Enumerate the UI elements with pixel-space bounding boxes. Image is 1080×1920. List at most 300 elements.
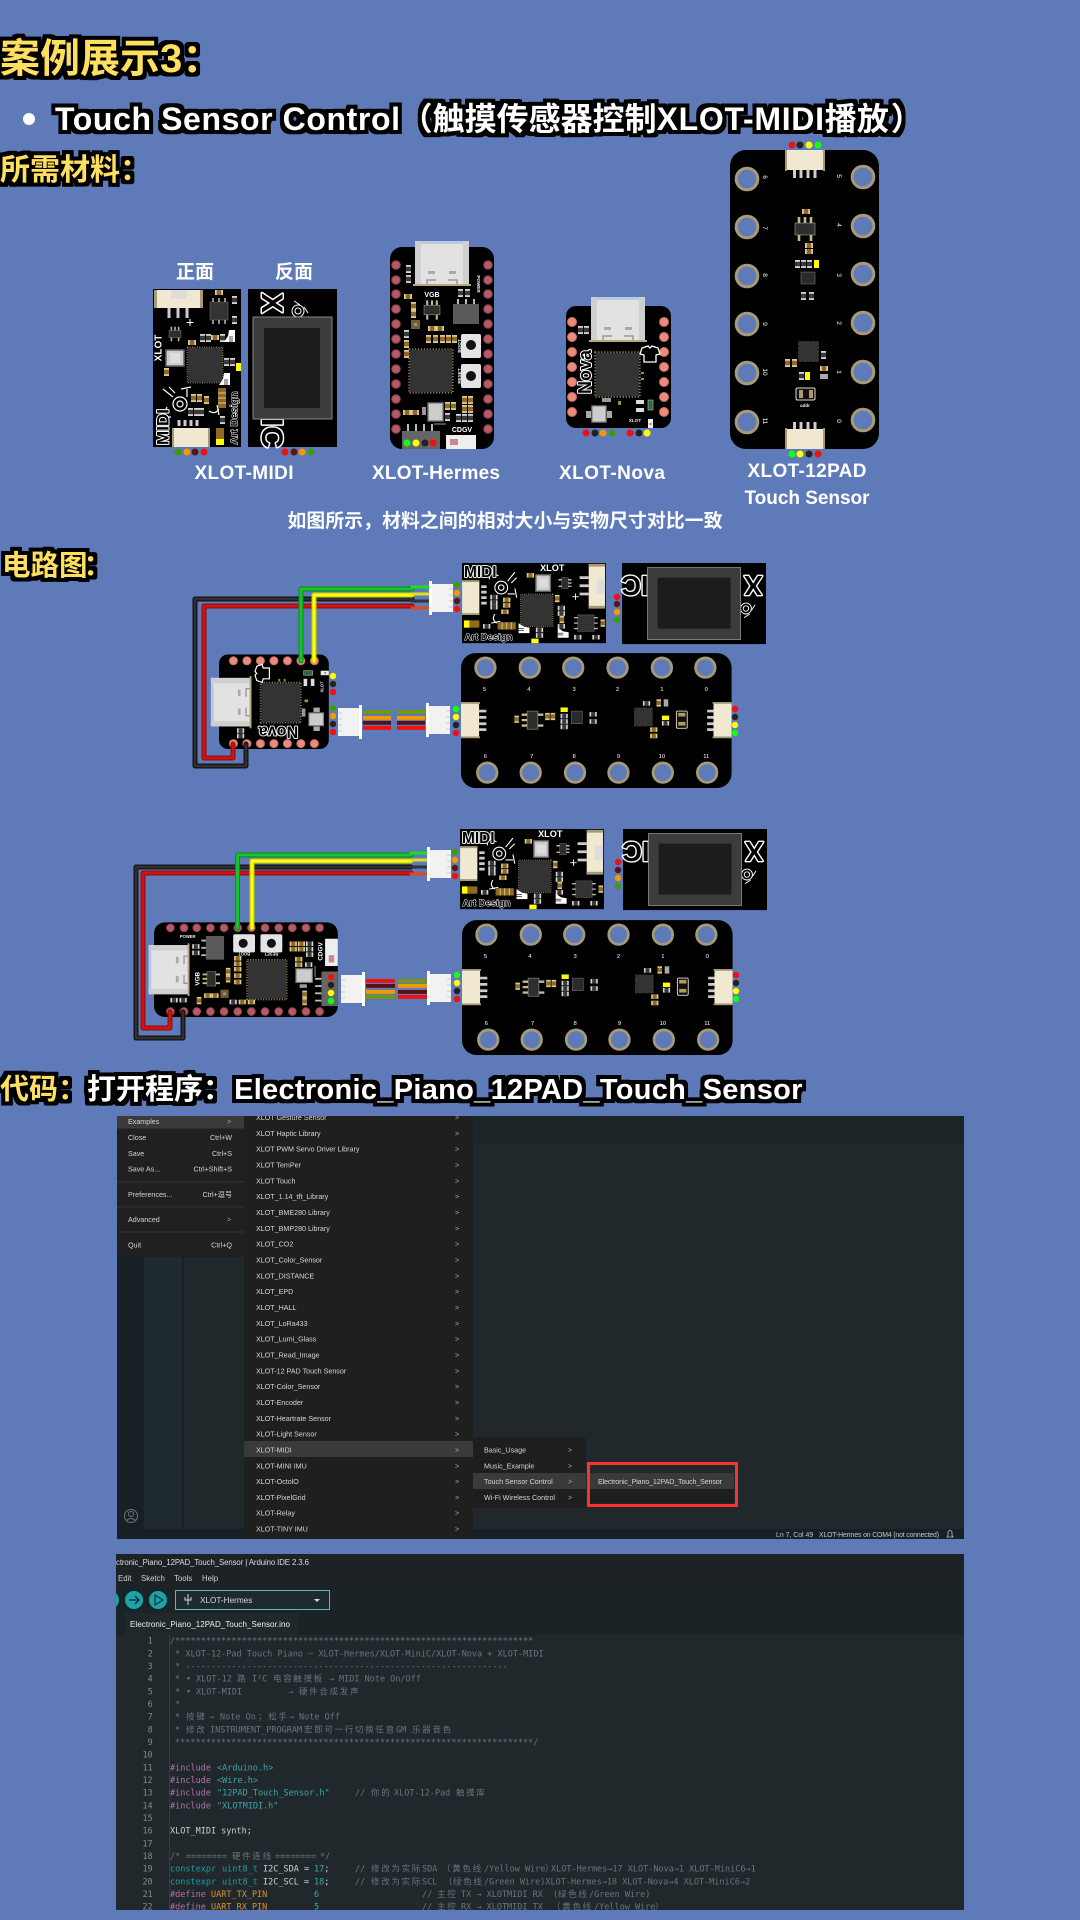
code: line numbers: 14	[142, 1801, 153, 1811]
pin dots: MIDI back	[614, 594, 620, 623]
code: line numbers: 12	[142, 1776, 153, 1786]
code: source text: /Yellow Wire	[594, 1903, 655, 1913]
code: source text: /*	[170, 1852, 180, 1862]
connector: MIDI cable	[427, 847, 451, 881]
board: 12PAD landscape: 10	[659, 754, 666, 760]
board selector: XLOT-Hermes	[200, 1596, 252, 1605]
code: source text: <Wire.h>	[217, 1776, 258, 1786]
menu: Examples list: XLOT Gesture Sensor	[256, 1114, 327, 1122]
code: line numbers: 19	[142, 1865, 153, 1875]
code: source text: #include	[170, 1789, 211, 1799]
pin dots: MIDI back	[615, 859, 621, 889]
board: MIDI back landscape	[622, 829, 767, 910]
window title bar	[116, 1559, 309, 1582]
menu: Examples list: >	[455, 1131, 459, 1138]
board: Hermes landscape: BOOT	[238, 951, 250, 956]
menu: Examples list: XLOT-Relay	[256, 1510, 295, 1518]
code: source text: #include	[170, 1801, 211, 1811]
menu: Touch Sensor Control submenu with red highlight	[588, 1464, 736, 1506]
board: 12PAD landscape: 11	[704, 1021, 710, 1027]
board: XLOT-12PAD touch sensor: 9	[761, 322, 768, 326]
code: source text: I2C_SDA =	[263, 1865, 314, 1875]
code: source text: 6	[314, 1890, 319, 1900]
icon: user	[124, 1510, 138, 1522]
label: back: 反面	[275, 261, 313, 283]
code: source text: XLOT_MIDI synth;	[170, 1827, 252, 1837]
menu: Examples list: XLOT-Light Sensor	[256, 1431, 317, 1439]
menu: XLOT-MIDI submenu: >	[568, 1495, 572, 1502]
board: Nova landscape: XLOT	[319, 681, 324, 692]
menu: Examples list: XLOT Touch	[256, 1177, 295, 1185]
menu: XLOT-MIDI submenu: >	[568, 1463, 572, 1470]
code: source text: 17	[314, 1865, 324, 1875]
board: 12PAD landscape: 7	[531, 1021, 534, 1027]
menu: Examples list: XLOT-PixelGrid	[256, 1494, 306, 1502]
code: source text: XLOT-MIDI	[196, 1687, 242, 1697]
board: MIDI front landscape: XLOT	[538, 829, 563, 839]
board: XLOT-12PAD touch sensor: 4	[835, 223, 842, 227]
board: XLOT-Hermes	[390, 241, 494, 449]
board: XLOT-12PAD touch sensor	[730, 142, 879, 458]
code: source text: （黄色线	[442, 1864, 483, 1875]
board: 12PAD landscape: 3	[573, 954, 577, 960]
board: 12PAD landscape: 1	[660, 687, 664, 693]
board: MIDI back landscape: IC	[621, 570, 648, 601]
code: source text: 5	[314, 1903, 319, 1913]
menu: Examples list: >	[455, 1432, 459, 1439]
code: source text: 主控	[437, 1902, 457, 1913]
menu: Examples list: XLOT-OctolO	[256, 1478, 299, 1486]
code: source text: (	[448, 1877, 453, 1887]
menu: XLOT-MIDI submenu	[473, 1437, 586, 1508]
menu: Examples list: XLOT_LoRa433	[256, 1320, 308, 1328]
menu: Examples list: >	[455, 1368, 459, 1375]
menu: File: Ctrl+S	[212, 1150, 232, 1158]
wires: Nova to MIDI	[195, 587, 429, 766]
board: 12PAD landscape: 0	[705, 687, 709, 693]
menu: Examples list: XLOT_CO2	[256, 1241, 293, 1249]
menu: File: Ctrl+逗号	[202, 1190, 232, 1199]
code: source text: Note On	[220, 1713, 256, 1723]
board: XLOT-Hermes: POWER	[476, 275, 481, 293]
board: Nova landscape	[211, 654, 329, 749]
code: source text: #define	[170, 1890, 206, 1900]
menu: Examples list: >	[455, 1495, 459, 1502]
code: line numbers	[142, 1637, 153, 1913]
board: XLOT-MIDI front	[153, 289, 241, 456]
code: source text: /Green Wire)XLOT-Hermes→18 XLOT-Nova→4 XLOT-MiniC6→2	[484, 1877, 750, 1887]
window title bar: Help	[202, 1574, 219, 1583]
board: MIDI front landscape: MIDI	[462, 830, 495, 847]
label: front: 正面	[176, 262, 214, 283]
code: source text: 按键	[186, 1712, 206, 1723]
code: source text: constexpr	[170, 1865, 216, 1875]
board: MIDI front landscape: Art Design	[464, 632, 513, 643]
code: line numbers: 4	[148, 1675, 153, 1685]
menu: File: Advanced	[128, 1216, 160, 1224]
board: XLOT-12PAD touch sensor: 11	[761, 418, 768, 425]
menu: XLOT-MIDI submenu: >	[568, 1479, 572, 1486]
menu: Examples list: >	[455, 1147, 459, 1154]
window title bar: Sketch	[141, 1574, 165, 1583]
code: line numbers: 8	[148, 1725, 153, 1735]
code: line numbers: 17	[142, 1839, 153, 1849]
menu: Examples list: >	[455, 1511, 459, 1518]
code: line numbers: 21	[142, 1890, 153, 1900]
code: source text: •	[186, 1675, 191, 1685]
menu: Examples list: XLOT_1.14_tft_Library	[256, 1193, 329, 1201]
board: 12PAD landscape: 8	[573, 1021, 577, 1027]
code: line numbers: 10	[142, 1751, 153, 1761]
board: XLOT-12PAD touch sensor: 2	[835, 321, 842, 325]
menu: Examples list: >	[455, 1463, 459, 1470]
code: source text: 乐器音色	[412, 1724, 453, 1735]
menu: File: Close	[128, 1134, 146, 1142]
code: source text: 主控	[437, 1889, 457, 1900]
code: line numbers: 18	[142, 1852, 153, 1862]
menu: Examples list: XLOT-Encoder	[256, 1399, 304, 1407]
board: Hermes landscape: RESET	[264, 951, 278, 956]
code: source text: /Yellow Wire	[484, 1865, 545, 1875]
menu: Examples list: >	[455, 1210, 459, 1217]
code: source text: 修改为实际	[371, 1864, 422, 1875]
code: source text: 触摸库	[456, 1788, 487, 1799]
code: source text: 修改为实际	[371, 1876, 422, 1887]
code: source text: →	[288, 1687, 293, 1697]
code: source text: →	[209, 1713, 214, 1723]
subtitle with bullet: Touch Sensor Control（触摸传感器控制XLOT-MIDI播放）	[55, 101, 923, 137]
menu: Examples list: >	[455, 1447, 459, 1454]
code: source text: 电容触摸板	[273, 1674, 324, 1685]
menu: File: >	[227, 1217, 231, 1224]
menu: Touch Sensor Control submenu with red highlight: Electronic_Piano_12PAD_Touch_Sensor	[598, 1478, 723, 1486]
menu: Examples list: XLOT-12 PAD Touch Sensor	[256, 1367, 347, 1375]
menu: Examples list: >	[455, 1305, 459, 1312]
code: source text: 宏即可一行切换任意	[304, 1724, 396, 1735]
code: source text: #include	[170, 1763, 211, 1773]
menu: Examples list: XLOT TemPer	[256, 1162, 302, 1170]
window title bar: Edit	[118, 1574, 132, 1583]
code: line numbers: 6	[148, 1700, 153, 1710]
board: 12PAD landscape: 2	[616, 687, 619, 693]
menu: Examples list: >	[455, 1289, 459, 1296]
board: Hermes landscape: CDGV	[317, 942, 324, 961]
code: source text: * ---------------------------------------------------------------	[170, 1662, 508, 1672]
code: source text: *	[175, 1713, 180, 1723]
menu: Examples list: XLOT_Color_Sensor	[256, 1256, 323, 1264]
code: line numbers: 7	[148, 1713, 153, 1723]
board: 12PAD landscape: 3	[572, 687, 576, 693]
cable: Hermes to 12PAD	[341, 971, 451, 1006]
code: source text: 绿色线	[453, 1876, 484, 1887]
board: Nova landscape: Nova	[258, 722, 298, 740]
code: source text: 修改	[186, 1724, 206, 1735]
board: MIDI front landscape	[462, 563, 606, 643]
status bar	[117, 1529, 964, 1539]
circuit diagram: Nova	[195, 563, 766, 788]
menu: File: Save As...	[128, 1166, 160, 1174]
pin dots: Hermes	[328, 974, 334, 1004]
menu: File: >	[227, 1119, 231, 1126]
title: case study 3: 案例展示3：	[0, 26, 222, 84]
code: source text	[170, 1637, 756, 1913]
code: source text: "XLOTMIDI.h"	[217, 1801, 278, 1811]
menu: Examples list	[244, 1114, 473, 1539]
code: source text: (	[553, 1890, 558, 1900]
menu: Examples list: XLOT_BMP280 Library	[256, 1225, 330, 1233]
code: source text: //	[422, 1890, 432, 1900]
board: 12PAD landscape	[462, 920, 733, 1055]
menu: Examples list: XLOT_EPD	[256, 1288, 293, 1296]
code: source text: •	[186, 1687, 191, 1697]
board: 12PAD landscape: 9	[618, 1021, 621, 1027]
menu: Examples list: XLOT-Heartrate Sensor	[256, 1415, 332, 1423]
menu: Examples list: XLOT-TINY IMU	[256, 1526, 308, 1534]
code: line numbers: 3	[148, 1662, 153, 1672]
code: source text: 18	[314, 1877, 324, 1887]
code: source text: /Green Wire)	[589, 1890, 650, 1900]
code: source text: ）	[655, 1902, 665, 1913]
code: line numbers: 9	[148, 1738, 153, 1748]
code: line numbers: 15	[142, 1814, 153, 1824]
code: source text: * XLOT-12-Pad Touch Piano – XLOT-Hermes/XLOT-MiniC/XLOT-Nova + XLOT-MIDI	[170, 1649, 544, 1659]
menu: XLOT-MIDI submenu: Touch Sensor Control	[484, 1478, 553, 1486]
code: source text: *	[175, 1700, 180, 1710]
code: source text: #define	[170, 1903, 206, 1913]
code: source text: TX → XLOTMIDI RX	[461, 1890, 544, 1900]
menu: Examples list: >	[455, 1416, 459, 1423]
code: source text: （黄色线	[552, 1902, 593, 1913]
circuit diagram: Hermes	[136, 829, 767, 1055]
pin dots: MIDI input	[452, 849, 458, 879]
code: source text: *	[175, 1687, 180, 1697]
menu: File: Examples	[128, 1118, 160, 1126]
code: source text: //	[355, 1789, 365, 1799]
screenshot: Arduino IDE examples menu	[117, 1114, 964, 1539]
heading: circuit diagram: 电路图：	[2, 543, 112, 584]
board: 12PAD landscape: 0	[706, 954, 710, 960]
menu: Examples list: XLOT-MIDI	[256, 1446, 292, 1454]
code: source text: XLOT-Hermes→17 XLOT-Nova→1 XLOT-MiniC6→1	[551, 1865, 756, 1875]
menu: Examples list: >	[455, 1194, 459, 1201]
status bar: XLOT-Hermes on COM4 (not connected)	[819, 1532, 939, 1539]
board: XLOT-12PAD touch sensor: 3	[835, 273, 842, 277]
board: 12PAD landscape: 9	[617, 754, 620, 760]
board: Hermes landscape: VGB	[194, 971, 201, 986]
menu: File: Preferences...	[128, 1191, 172, 1199]
code: source text: I²C	[252, 1675, 267, 1685]
code: source text: "12PAD_Touch_Sensor.h"	[217, 1789, 330, 1799]
window title bar: Tools	[174, 1574, 192, 1583]
menu: File: Ctrl+Shift+S	[194, 1166, 232, 1174]
board: 12PAD landscape: 8	[572, 754, 576, 760]
board: 12PAD landscape: 5	[483, 687, 487, 693]
code: line numbers: 20	[142, 1877, 153, 1887]
code: line numbers: 11	[142, 1763, 153, 1773]
code: source text: //	[355, 1877, 365, 1887]
menu: Examples list: XLOT-MINI IMU	[256, 1462, 307, 1470]
menu: Examples list: XLOT-Color_Sensor	[256, 1383, 321, 1391]
menu: Examples list: >	[455, 1242, 459, 1249]
board: 12PAD landscape: 6	[485, 1021, 489, 1027]
code: line numbers: 22	[142, 1903, 153, 1913]
code: source text: 绿色线	[558, 1889, 589, 1900]
code: source text: ；松手	[258, 1712, 289, 1723]
heading: materials: 所需材料：	[0, 145, 150, 189]
board: MIDI front landscape: MIDI	[464, 564, 497, 581]
menu: Examples list: >	[455, 1273, 459, 1280]
code: source text: //	[422, 1903, 432, 1913]
board selector	[176, 1590, 330, 1610]
board: 12PAD landscape: 6	[484, 754, 488, 760]
code: source text: UART_TX_PIN	[211, 1890, 267, 1900]
board: XLOT-MIDI back: X	[255, 293, 288, 313]
menu: XLOT-MIDI submenu: >	[568, 1447, 572, 1454]
board: XLOT-Hermes: BOOT	[457, 339, 462, 353]
board: XLOT-MIDI front: XLOT	[154, 335, 165, 361]
board: 12PAD landscape	[461, 653, 732, 788]
menu: XLOT-MIDI submenu: Music_Example	[484, 1462, 534, 1470]
label: XLOT-12PAD Touch Sensor: XLOT-12PAD	[748, 461, 866, 482]
code: source text: Note Off	[299, 1713, 340, 1723]
menu: XLOT-MIDI submenu: Wi-Fi Wireless Control	[484, 1494, 555, 1502]
menu: Examples list: XLOT PWM Servo Driver Library	[256, 1146, 360, 1154]
code: source text: uint8_t	[222, 1865, 258, 1875]
board: Hermes landscape: POWER	[180, 934, 196, 939]
menu: File: Ctrl+Q	[211, 1242, 232, 1250]
code: source text: 路	[237, 1674, 247, 1685]
board: 12PAD landscape: 4	[527, 687, 531, 693]
menu: File: Save	[128, 1150, 144, 1158]
menu: Examples list: >	[455, 1115, 459, 1122]
code: source text: /**********************************************************************	[170, 1637, 533, 1647]
screenshot: Arduino IDE code editor	[101, 1554, 964, 1913]
pin dots: 12PAD	[454, 972, 739, 1002]
code: source text: UART_RX_PIN	[211, 1903, 267, 1913]
code: source text: XLOT-12	[196, 1675, 232, 1685]
code: source text: INSTRUMENT_PROGRAM	[210, 1725, 302, 1735]
board: XLOT-Hermes: CDGV	[452, 427, 472, 434]
code: source text: <Arduino.h>	[217, 1763, 273, 1773]
menu: Examples list: XLOT_BME280 Library	[256, 1209, 330, 1217]
code: source text: */	[320, 1852, 330, 1862]
code: source text: 硬件合成发声	[299, 1686, 360, 1697]
code: source text: 你的	[371, 1788, 391, 1799]
code: source text: ;	[324, 1877, 329, 1887]
board: 12PAD landscape: 5	[484, 954, 488, 960]
menu: Examples list: >	[455, 1527, 459, 1534]
code: source text: I2C_SCL =	[263, 1877, 314, 1887]
board: XLOT-12PAD touch sensor: addr	[800, 403, 810, 408]
menu: Examples list: XLOT Haptic Library	[256, 1130, 321, 1138]
board: 12PAD landscape: 7	[530, 754, 533, 760]
menu: Examples list: >	[455, 1400, 459, 1407]
menu: Examples list: >	[455, 1337, 459, 1344]
board: MIDI back landscape: X	[744, 570, 762, 601]
code: source text: **********************************************************************/	[175, 1738, 538, 1748]
menu: File	[117, 1116, 244, 1257]
board: XLOT-Nova: Nova	[575, 349, 595, 394]
pin dots: 12PAD	[453, 706, 738, 736]
board: XLOT-12PAD touch sensor: 1	[835, 370, 842, 374]
board: XLOT-Hermes: RESET	[457, 368, 462, 384]
window title bar: ctronic_Piano_12PAD_Touch_Sensor | Arduino IDE 2.3.6	[116, 1558, 309, 1567]
board: XLOT-Nova: XLOT	[629, 418, 641, 423]
code: source text: //	[355, 1865, 365, 1875]
board: XLOT-12PAD touch sensor: 8	[761, 273, 768, 277]
label: XLOT-12PAD Touch Sensor: Touch Sensor	[744, 488, 870, 509]
code: source text: XLOT-12-Pad	[394, 1789, 450, 1799]
code: source text: MIDI Note On/Off	[339, 1675, 421, 1685]
board: XLOT-MIDI front: Art Design	[228, 391, 240, 445]
board: XLOT-12PAD touch sensor: 5	[835, 174, 842, 178]
label: XLOT-Nova: XLOT-Nova	[559, 463, 665, 484]
code: source text: ========	[275, 1852, 316, 1862]
cable: Nova to 12PAD	[338, 703, 450, 739]
code: line numbers: 13	[142, 1789, 153, 1799]
code: line numbers: 5	[148, 1687, 153, 1697]
code: line numbers: 2	[148, 1649, 153, 1659]
code: source text: SCL	[422, 1877, 437, 1887]
menu: File: Quit	[128, 1242, 141, 1250]
label: XLOT-Hermes: XLOT-Hermes	[372, 463, 500, 484]
code: source text: ）	[545, 1864, 555, 1875]
board: XLOT-MIDI front: MIDI	[153, 409, 172, 445]
menu: Examples list: XLOT_Read_Image	[256, 1352, 320, 1360]
file tab: Electronic_Piano_12PAD_Touch_Sensor.ino	[130, 1620, 291, 1629]
menu: Examples list: >	[455, 1226, 459, 1233]
pin dots: MIDI input	[454, 582, 460, 612]
board: XLOT-12PAD touch sensor: 0	[835, 419, 842, 423]
code: source text: *	[175, 1725, 180, 1735]
menu: Examples list: >	[455, 1384, 459, 1391]
code: source text: RX → XLOTMIDI TX	[461, 1903, 544, 1913]
board: 12PAD landscape: 1	[661, 954, 665, 960]
label: XLOT-MIDI: XLOT-MIDI	[194, 463, 294, 484]
board: MIDI front landscape: Art Design	[462, 898, 511, 909]
menu: Examples list: >	[455, 1352, 459, 1360]
code: source text: →	[289, 1713, 294, 1723]
menu: Examples list: >	[455, 1178, 459, 1185]
code: source text: 硬件连线	[232, 1851, 273, 1862]
pin dots: Nova	[330, 673, 336, 735]
code: source text: GM	[396, 1725, 406, 1735]
board: 12PAD landscape: 10	[660, 1021, 667, 1027]
board: MIDI back landscape	[621, 563, 766, 644]
heading: code, open program: 代码：打开程序：Electronic_Piano_12PAD_Touch_Sensor	[0, 1066, 803, 1108]
caption: relative sizes: 如图所示，材料之间的相对大小与实物尺寸对比一致	[288, 509, 723, 531]
code: source text: #include	[170, 1776, 211, 1786]
board: 12PAD landscape: 4	[528, 954, 532, 960]
menu: Examples list: XLOT_HALL	[256, 1304, 297, 1312]
board: MIDI back landscape: X	[745, 836, 763, 867]
menu: Examples list: >	[455, 1162, 459, 1170]
status bar: Ln 7, Col 49	[776, 1532, 813, 1539]
wires: Hermes to MIDI	[136, 853, 427, 1038]
menu: Examples list: XLOT_DISTANCE	[256, 1272, 314, 1280]
code: source text: ========	[186, 1852, 227, 1862]
code: source text: uint8_t	[222, 1877, 258, 1887]
code: source text: ;	[324, 1865, 329, 1875]
toolbar	[116, 1590, 330, 1610]
board: XLOT-12PAD touch sensor: 10	[761, 368, 768, 376]
code: source text: SDA	[422, 1865, 437, 1875]
code: source text: →	[329, 1675, 334, 1685]
menu: File: Ctrl+W	[210, 1134, 232, 1142]
board: XLOT-MIDI back: IC	[255, 418, 288, 448]
board: MIDI front landscape: XLOT	[540, 563, 565, 573]
code: source text: *	[175, 1675, 180, 1685]
